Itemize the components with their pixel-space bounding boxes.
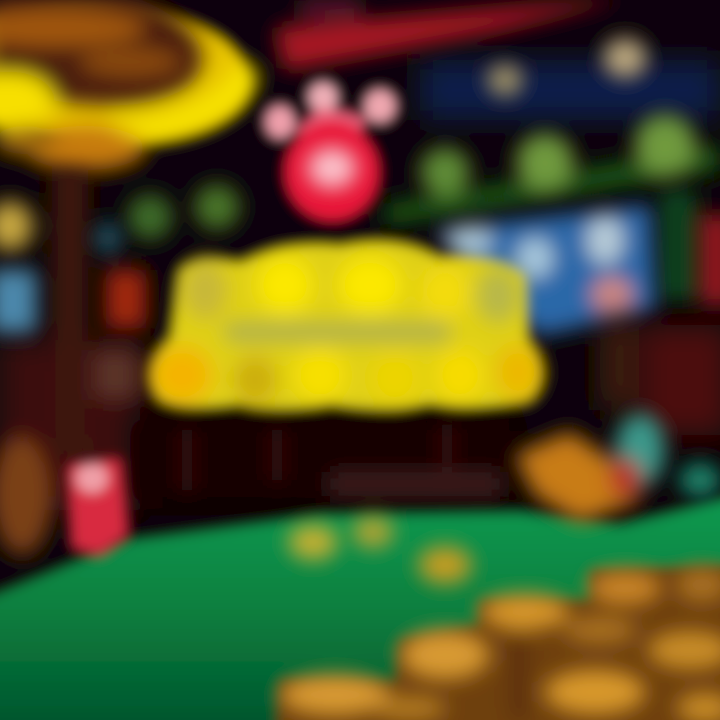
wooden pillar [0,170,88,450]
blue screens [435,205,655,335]
gold coin stacks foreground [275,565,720,720]
pink ball and petals [264,81,397,222]
back wall: navy band [0,60,720,510]
left blue panel and slot machine [0,222,146,400]
yellow ring lamp [0,0,258,170]
orange coin pile right with teal figure [515,414,720,522]
loose coins on table [289,517,471,583]
red cup [68,458,128,556]
yellow coin pile [152,241,541,412]
ceiling lights [488,39,646,95]
dark red booth [604,320,720,435]
dark table base [130,418,515,503]
red ceiling band [275,0,620,70]
green felt table [0,495,720,720]
green garland [128,115,720,305]
orange figure left [0,435,52,555]
